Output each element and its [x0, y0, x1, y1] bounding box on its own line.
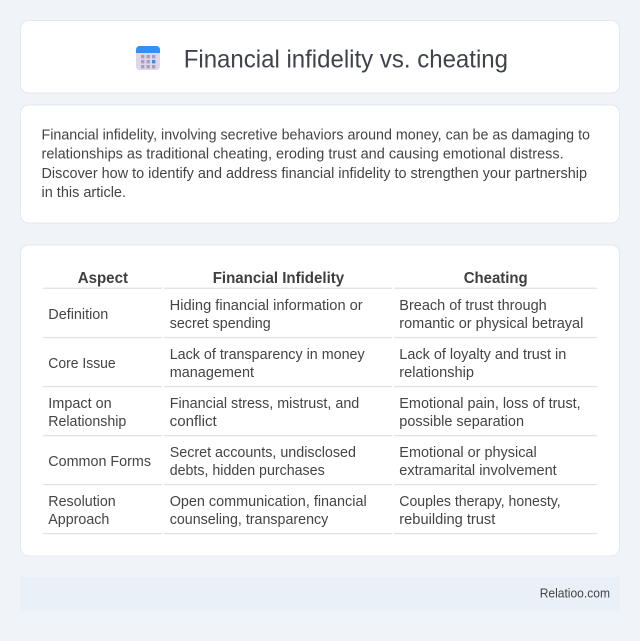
table row: Resolution Approach: Resolution — [48, 494, 116, 510]
panel: header — [20, 20, 620, 93]
table header row: Cheating — [464, 270, 528, 287]
table row: Impact on Relationship — [43, 396, 597, 436]
title: Financial infidelity vs. cheating — [184, 46, 508, 74]
text block: intro paragraph — [42, 126, 590, 201]
text block: intro paragraph: Discover how to identify and address financial infidelity to strengthen your partnership — [42, 165, 587, 182]
table header row: Aspect — [78, 270, 128, 287]
table row: Common Forms — [43, 445, 597, 485]
icon: calendar — [136, 46, 160, 70]
table row: Core Issue: relationship — [399, 365, 474, 381]
table row: Resolution Approach: Open communication, financial — [170, 494, 367, 510]
text block: intro paragraph: relationships as traditional cheating, eroding trust and causing emotional distress. — [42, 146, 564, 163]
table row: Common Forms: extramarital involvement — [399, 463, 557, 479]
footer credit: Relatioo.com — [540, 587, 610, 601]
table row: Common Forms: Emotional or physical — [399, 445, 537, 461]
table header row — [43, 270, 597, 289]
table row: Definition — [43, 298, 597, 338]
table row: Definition: Breach of trust through — [399, 298, 547, 314]
panel: comparison table — [20, 245, 620, 556]
table row: Common Forms: debts, hidden purchases — [170, 463, 325, 479]
table row: Resolution Approach: Approach — [48, 512, 109, 528]
table row: Definition: secret spending — [170, 316, 271, 332]
table row: Definition: Definition — [48, 307, 108, 323]
table row: Impact on Relationship: Financial stress, mistrust, and — [170, 396, 359, 412]
table row: Core Issue: Lack of loyalty and trust in — [399, 347, 566, 363]
text block: intro paragraph: in this article. — [42, 184, 126, 201]
text block: intro paragraph: Financial infidelity, involving secretive behaviors around money, can be as damaging to — [42, 126, 590, 143]
table row: Common Forms: Common Forms — [48, 454, 151, 470]
table row: Resolution Approach: Couples therapy, honesty, — [399, 494, 561, 510]
table row: Definition: Hiding financial information or — [170, 298, 363, 314]
table row: Core Issue: Lack of transparency in money — [170, 347, 365, 363]
table row: Core Issue: Core Issue — [48, 356, 116, 372]
table row: Common Forms: Secret accounts, undisclosed — [170, 445, 356, 461]
table row: Resolution Approach — [43, 494, 597, 534]
table header row: Financial Infidelity — [213, 270, 345, 287]
table row: Core Issue: management — [170, 365, 254, 381]
table row: Resolution Approach: counseling, transparency — [170, 512, 329, 528]
footer — [20, 577, 620, 611]
table row: Definition: romantic or physical betrayal — [399, 316, 583, 332]
table row: Core Issue — [43, 347, 597, 387]
panel: introduction — [20, 105, 620, 223]
table row: Impact on Relationship: possible separation — [399, 414, 524, 430]
table row: Impact on Relationship: Emotional pain, loss of trust, — [399, 396, 581, 412]
table row: Impact on Relationship: Relationship — [48, 414, 126, 430]
table row: Impact on Relationship: conflict — [170, 414, 217, 430]
table row: Impact on Relationship: Impact on — [48, 396, 112, 412]
table row: Resolution Approach: rebuilding trust — [399, 512, 495, 528]
